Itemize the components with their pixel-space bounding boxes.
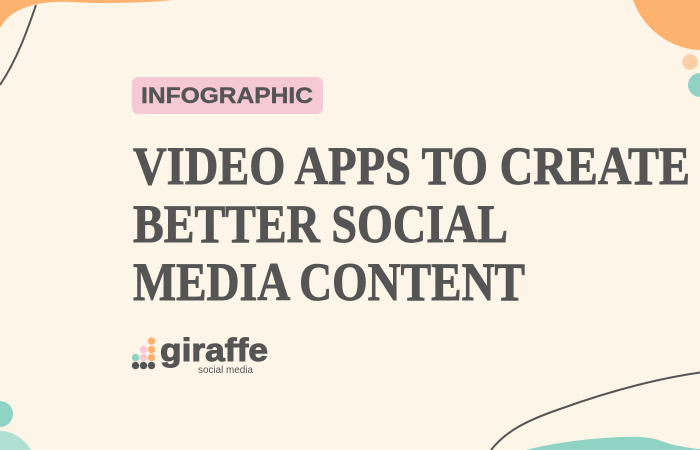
logo: giraffe social media — [132, 332, 268, 376]
shape: top-right orange blob — [633, 0, 700, 50]
badge: infographic: INFOGRAPHIC — [141, 83, 313, 108]
logo tagline: social media — [198, 364, 253, 376]
shape: bottom-left light teal blob — [0, 431, 31, 450]
shape: bottom-right teal blob — [526, 437, 700, 450]
badge: infographic — [132, 77, 323, 114]
shape: bottom-left teal circle — [0, 401, 13, 427]
shape: small peach circle — [682, 54, 698, 70]
line: top-left curve — [0, 5, 36, 85]
logo wordmark: giraffe — [160, 332, 268, 368]
title — [133, 136, 690, 312]
title: MEDIA CONTENT — [133, 252, 525, 312]
shape: top-left orange blob — [0, 0, 173, 28]
title: BETTER SOCIAL — [133, 194, 508, 254]
line: bottom-right curve — [491, 372, 700, 450]
icon: logo dots — [132, 337, 155, 369]
shape: right teal circle — [688, 73, 700, 97]
